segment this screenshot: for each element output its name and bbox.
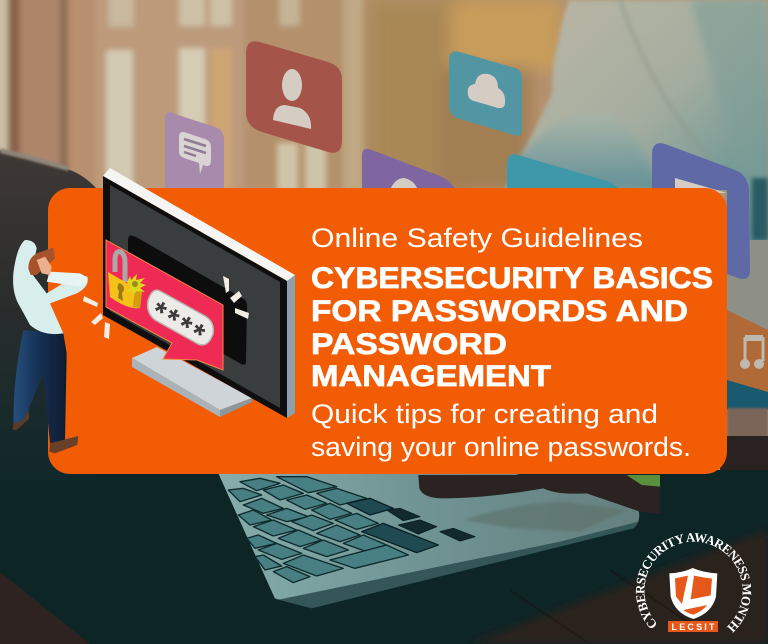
hair [28, 247, 55, 275]
hand shadow [463, 502, 627, 532]
hand [418, 475, 660, 513]
subtitle: saving your online passwords. [311, 432, 691, 462]
password alert bubble [106, 240, 223, 370]
badge: cybersecurity awareness month [636, 533, 752, 633]
title: CYBERSECURITY BASICS [311, 262, 713, 295]
shoes [49, 436, 78, 453]
monitor stand [132, 347, 252, 417]
hand [37, 257, 52, 275]
title: PASSWORD [311, 328, 507, 361]
icon: teal app [507, 154, 622, 190]
password field: **** [145, 295, 210, 352]
shirt [13, 240, 88, 334]
circular text: CYBERSECURITY AWARENESS MONTH [636, 533, 752, 633]
icon: mail app [652, 143, 750, 279]
shield logo [669, 568, 717, 619]
icon: profile app [246, 41, 342, 153]
padlock icon [108, 252, 146, 308]
trousers [13, 330, 67, 443]
laptop deck [273, 515, 639, 608]
title [311, 262, 713, 393]
title: MANAGEMENT [311, 360, 551, 393]
monitor body [103, 168, 295, 418]
alert marks near man [83, 296, 110, 339]
illustration: monitor [103, 168, 295, 418]
laptop lid [0, 150, 96, 480]
alert marks near monitor [223, 276, 249, 319]
bottom dark area [0, 470, 768, 644]
laptop keyboard [218, 473, 660, 608]
illustration: stressed man [13, 240, 88, 453]
icon: music app [727, 310, 768, 392]
icon: cloud app [449, 51, 522, 136]
person's shirt [505, 0, 768, 250]
subtitle: Quick tips for creating and [311, 399, 658, 429]
icon: globe app [362, 149, 456, 190]
icon: chat app [165, 112, 224, 190]
lecsit wordmark: LECSIT [672, 622, 715, 632]
title: FOR PASSWORDS AND [311, 295, 688, 328]
chat bubble [179, 132, 211, 174]
orange panel [48, 188, 727, 474]
heading: online safety guidelines: Online Safety Guidelines [311, 223, 643, 253]
keys [228, 477, 408, 583]
subtitle [311, 399, 691, 462]
